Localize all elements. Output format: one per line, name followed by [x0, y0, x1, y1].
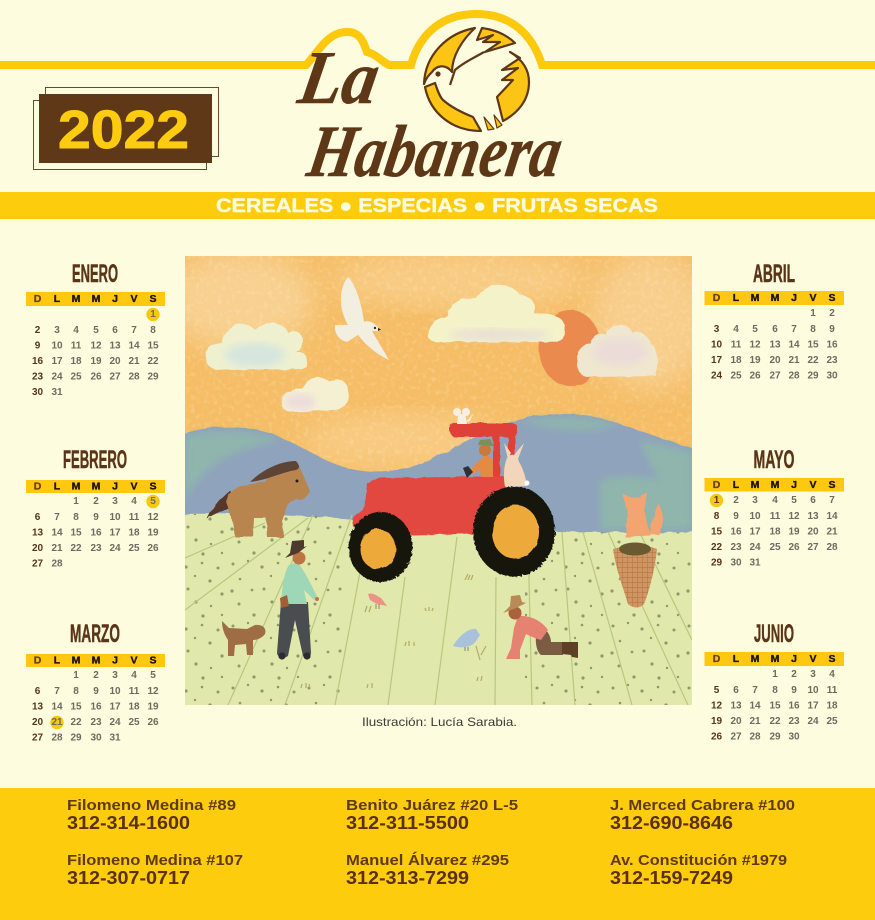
calendar: abril: 8 — [810, 324, 816, 335]
calendar: junio: 21 — [749, 716, 761, 727]
calendar: enero: L — [54, 293, 61, 305]
calendar: enero — [26, 260, 165, 398]
calendar: abril: 15 — [807, 340, 819, 350]
calendar: marzo: 12 — [147, 686, 159, 697]
calendar: mayo: M — [771, 479, 780, 491]
calendar: mayo: 20 — [807, 526, 819, 538]
calendar: abril: 28 — [788, 370, 800, 382]
footer panel: branches and phones — [0, 788, 875, 920]
branch 2: Benito Juárez #20 L-5 — [346, 797, 518, 814]
calendar: junio: 10 — [807, 685, 819, 696]
calendar: febrero: 19 — [147, 528, 159, 538]
calendar: enero: 13 — [109, 340, 121, 352]
calendar: febrero: 12 — [147, 512, 159, 523]
calendar: mayo: 12 — [788, 511, 800, 522]
calendar: abril: 26 — [749, 370, 761, 382]
calendar: marzo: 14 — [51, 702, 63, 712]
month title: ENERO — [72, 260, 118, 288]
sky — [165, 250, 710, 556]
blue bird — [453, 629, 480, 651]
calendar: mayo: 1 — [714, 495, 720, 506]
calendar: marzo: L — [54, 654, 61, 666]
calendar: junio: 15 — [769, 700, 781, 712]
calendar: enero: 15 — [147, 340, 159, 352]
calendar: junio: M — [771, 653, 780, 665]
calendar: marzo: 2 — [93, 670, 99, 681]
calendar: abril: L — [733, 292, 740, 304]
tagline band: CEREALES ● ESPECIAS ● FRUTAS SECAS — [216, 196, 658, 217]
calendar: mayo: 29 — [711, 558, 722, 568]
calendar: mayo: 7 — [829, 495, 835, 506]
calendar: mayo: 19 — [788, 526, 800, 538]
illustration credit: Ilustración: Lucía Sarabia. — [362, 715, 517, 729]
calendar: enero: 2 — [35, 325, 41, 336]
calendar: marzo: 10 — [109, 686, 121, 697]
calendar: junio: 13 — [730, 700, 742, 712]
calendar: enero: 17 — [51, 356, 63, 367]
calendar: abril: J — [791, 292, 797, 304]
calendar: febrero: D — [34, 480, 42, 492]
branch 6: 312-159-7249 — [610, 867, 733, 888]
mouse — [453, 408, 473, 424]
sun — [539, 310, 601, 386]
hills — [170, 414, 705, 560]
calendar: junio: 17 — [807, 700, 819, 712]
branch 1: Filomeno Medina #89 — [67, 797, 236, 814]
calendar: abril — [704, 260, 844, 382]
calendar: febrero: 4 — [131, 496, 137, 507]
branch 4 — [67, 852, 243, 888]
cloud lower — [282, 377, 348, 412]
calendar: enero: 10 — [51, 340, 63, 352]
calendar: febrero: 28 — [51, 558, 63, 570]
calendar: mayo: 9 — [733, 511, 739, 522]
calendar: mayo: 16 — [730, 526, 742, 538]
calendar: enero: 3 — [54, 325, 60, 336]
calendar: marzo: 15 — [70, 702, 82, 712]
calendar: enero: 4 — [73, 325, 79, 336]
calendar: enero: 16 — [32, 356, 43, 367]
branch 3: J. Merced Cabrera #100 — [610, 797, 795, 814]
calendar: marzo: 4 — [131, 670, 137, 681]
calendar: marzo: 29 — [70, 732, 82, 744]
calendar: abril: 9 — [829, 324, 835, 335]
calendar: marzo: 17 — [109, 702, 121, 712]
calendar: abril: 29 — [807, 370, 819, 382]
calendar: junio: 4 — [829, 669, 835, 680]
branch 4: 312-307-0717 — [67, 867, 190, 888]
calendar: junio: 3 — [810, 669, 816, 680]
standing farmer — [277, 540, 319, 660]
branch 6: Av. Constitución #1979 — [610, 852, 787, 869]
calendar: abril: 10 — [711, 340, 722, 350]
calendar: marzo: 6 — [35, 686, 41, 697]
calendar: marzo: 21 — [51, 717, 63, 728]
logo wordmark: La Habanera — [292, 36, 568, 193]
calendar: abril: V — [809, 292, 817, 304]
calendar: mayo: S — [828, 479, 836, 491]
calendar: abril: 12 — [749, 340, 761, 350]
rabbit — [504, 443, 530, 487]
calendar: marzo: 30 — [90, 732, 102, 744]
grass tufts — [301, 574, 486, 688]
calendar: enero: 11 — [71, 340, 82, 352]
branch 3 — [610, 797, 795, 833]
small wheel — [348, 512, 412, 582]
calendar: marzo: 19 — [147, 702, 159, 712]
calendar: marzo: 1 — [73, 670, 79, 681]
calendar: marzo: 18 — [128, 702, 140, 712]
calendar: abril: 18 — [730, 355, 742, 366]
branch 3: 312-690-8646 — [610, 812, 733, 833]
calendar: enero: 26 — [90, 372, 102, 382]
calendar: marzo: 27 — [32, 732, 43, 744]
calendar: junio: 24 — [807, 716, 819, 727]
calendar: abril: 6 — [772, 324, 778, 335]
calendar: marzo: 28 — [51, 732, 63, 744]
calendar: junio: 22 — [769, 716, 781, 727]
calendar: enero: 14 — [128, 340, 140, 352]
calendar: marzo: 7 — [54, 686, 60, 697]
calendar: febrero: 13 — [32, 528, 43, 538]
field — [170, 514, 705, 725]
tagline band — [0, 192, 875, 219]
calendar: junio: D — [713, 653, 721, 665]
calendar: mayo: 3 — [752, 495, 758, 506]
calendar: enero: 19 — [90, 356, 102, 367]
calendar: enero: S — [149, 293, 157, 305]
calendar: junio: 7 — [752, 685, 758, 696]
driver — [463, 439, 494, 478]
calendar: febrero: 8 — [73, 512, 79, 523]
calendar: enero: 22 — [147, 356, 159, 367]
calendar: enero: 12 — [90, 340, 102, 352]
calendar: febrero: J — [112, 480, 118, 492]
calendar: abril: 4 — [733, 324, 739, 335]
branch 2: 312-311-5500 — [346, 812, 469, 833]
calendar: febrero: 23 — [90, 543, 102, 554]
calendar: febrero: 20 — [32, 543, 43, 554]
calendar: marzo: V — [130, 654, 138, 666]
tractor body — [352, 476, 507, 535]
calendar: marzo: 26 — [147, 717, 159, 728]
month title: MARZO — [70, 620, 120, 648]
calendar: marzo: 13 — [32, 702, 43, 712]
calendar: febrero: M — [92, 480, 101, 492]
calendar: mayo: 22 — [711, 542, 722, 553]
calendar: febrero: 25 — [128, 543, 140, 554]
cloud left — [206, 324, 307, 370]
year badge — [34, 88, 218, 170]
calendar: febrero: 10 — [109, 512, 121, 523]
calendar: mayo: 15 — [711, 526, 722, 538]
calendar: enero: M — [92, 293, 101, 305]
calendar: enero: 24 — [51, 372, 63, 382]
big wheel — [473, 486, 555, 576]
calendar: mayo: V — [809, 479, 817, 491]
branch 5: Manuel Álvarez #295 — [346, 852, 509, 869]
calendar: marzo — [26, 620, 165, 744]
calendar: enero: D — [34, 293, 42, 305]
calendar: enero: 8 — [150, 325, 156, 336]
calendar: marzo: J — [112, 654, 118, 666]
calendar: marzo: M — [92, 654, 101, 666]
calendar: enero: 9 — [35, 340, 41, 352]
calendar: marzo: 31 — [109, 732, 121, 744]
branch 5: 312-313-7299 — [346, 867, 469, 888]
calendar: febrero: 2 — [93, 496, 99, 507]
calendar: febrero: 5 — [150, 496, 156, 507]
calendar: febrero: 7 — [54, 512, 60, 523]
calendar: enero: 25 — [70, 372, 82, 382]
calendar: abril: 14 — [788, 340, 800, 350]
pink bird — [368, 593, 387, 609]
calendar: abril: 30 — [826, 370, 838, 382]
calendar: junio: 2 — [791, 669, 797, 680]
calendar: abril: 27 — [769, 370, 781, 382]
calendar: abril: M — [771, 292, 780, 304]
calendar: abril: 21 — [788, 355, 800, 366]
cloud over sun — [577, 324, 657, 377]
calendar: marzo: 24 — [109, 717, 121, 728]
calendar: mayo: 24 — [749, 542, 761, 553]
branch 6 — [610, 852, 787, 888]
calendar: enero: 31 — [51, 387, 63, 398]
calendar: junio: V — [809, 653, 817, 665]
calendar: febrero: 16 — [90, 528, 102, 538]
calendar: marzo: 25 — [128, 717, 140, 728]
calendar: mayo — [704, 446, 844, 568]
calendar: junio: 12 — [711, 700, 722, 712]
calendar: enero: 5 — [93, 325, 99, 336]
header yellow contour line — [0, 14, 875, 65]
calendar: febrero: 18 — [128, 528, 140, 538]
calendar: junio: 16 — [788, 700, 800, 712]
calendar: junio: 30 — [788, 732, 800, 742]
panel: farm illustration — [185, 256, 692, 705]
calendar: junio: M — [751, 653, 760, 665]
calendar: junio: 27 — [730, 732, 742, 742]
calendar: mayo: 25 — [769, 542, 781, 553]
month title: FEBRERO — [63, 446, 127, 474]
dog — [222, 621, 265, 656]
calendar: marzo: 22 — [70, 717, 82, 728]
calendar: junio: 1 — [772, 669, 778, 680]
calendar: junio: J — [791, 653, 797, 665]
calendar: abril: S — [828, 292, 836, 304]
calendar: abril: 2 — [829, 308, 835, 319]
calendar: abril: 16 — [826, 340, 838, 350]
calendar: junio: 19 — [711, 716, 722, 727]
month title: JUNIO — [754, 620, 794, 648]
logo wordmark: La Habanera: La — [292, 36, 386, 120]
calendar: marzo: 5 — [150, 670, 156, 681]
calendar: junio: 23 — [788, 716, 800, 727]
calendar: abril: 23 — [826, 355, 838, 366]
calendar: febrero: S — [149, 480, 157, 492]
calendar: febrero: 15 — [70, 528, 82, 538]
cloud upper right — [428, 285, 565, 342]
calendar: enero: 23 — [32, 372, 43, 382]
year badge: 2022 — [58, 100, 189, 160]
calendar: febrero: 1 — [73, 496, 79, 507]
calendar: febrero — [26, 446, 165, 570]
calendar: enero: 20 — [109, 356, 121, 367]
kneeling farmer — [503, 595, 578, 659]
calendar: abril: 7 — [791, 324, 797, 335]
calendar: junio: 26 — [711, 732, 722, 742]
calendar: abril: 11 — [731, 340, 742, 350]
calendar: junio: 9 — [791, 685, 797, 696]
calendar: enero: M — [72, 293, 81, 305]
calendar: febrero: M — [72, 480, 81, 492]
calendar: febrero: L — [54, 480, 61, 492]
icon: dove logo — [424, 26, 529, 132]
calendar: mayo: 4 — [772, 495, 778, 506]
calendar: febrero: V — [130, 480, 138, 492]
calendar: mayo: 17 — [749, 526, 761, 538]
month title: MAYO — [754, 446, 794, 474]
calendar: marzo: S — [149, 654, 157, 666]
calendar: marzo: 20 — [32, 717, 43, 728]
calendar: febrero: 6 — [35, 512, 41, 523]
calendar: mayo: 28 — [826, 542, 838, 553]
calendar: mayo: 11 — [770, 511, 781, 522]
basket — [613, 542, 657, 607]
calendar: febrero: 24 — [109, 543, 121, 554]
calendar: febrero: 27 — [32, 558, 43, 570]
calendar: febrero: 14 — [51, 528, 63, 538]
calendar: enero: 7 — [131, 325, 137, 336]
calendar: junio: 8 — [772, 685, 778, 696]
calendar: mayo: 31 — [749, 558, 761, 568]
calendar: marzo: 11 — [129, 686, 140, 697]
calendar: abril: 22 — [807, 355, 819, 366]
tractor — [348, 408, 555, 582]
branch 1 — [67, 797, 236, 833]
calendar: marzo: 8 — [73, 686, 79, 697]
calendar: mayo: 23 — [730, 542, 742, 553]
calendar: junio: 5 — [714, 685, 720, 696]
calendar: mayo: M — [751, 479, 760, 491]
calendar: mayo: 26 — [788, 542, 800, 553]
calendar: enero: 6 — [112, 325, 118, 336]
calendar: abril: 25 — [730, 370, 742, 382]
branch 5 — [346, 852, 509, 888]
calendar: febrero: 11 — [129, 512, 140, 523]
calendar: enero: 28 — [128, 372, 140, 382]
horse — [207, 461, 310, 537]
month title: ABRIL — [753, 260, 795, 288]
calendar: mayo: 13 — [807, 511, 819, 522]
calendar: enero: 27 — [109, 372, 121, 382]
calendar: febrero: 9 — [93, 512, 99, 523]
calendar: mayo: 8 — [714, 511, 720, 522]
calendar: marzo: 23 — [90, 717, 102, 728]
calendar: junio: 29 — [769, 732, 781, 742]
calendar: mayo: 27 — [807, 542, 819, 553]
calendar: junio — [704, 620, 844, 742]
calendar: junio: 6 — [733, 685, 739, 696]
calendar: febrero: 3 — [112, 496, 118, 507]
calendar: mayo: 5 — [791, 495, 797, 506]
calendar: abril: D — [713, 292, 721, 304]
calendar: mayo: L — [733, 479, 740, 491]
calendar: marzo: 3 — [112, 670, 118, 681]
calendar: enero: 1 — [150, 309, 156, 320]
branch 2 — [346, 797, 518, 833]
branch 4: Filomeno Medina #107 — [67, 852, 243, 869]
calendar: junio: 18 — [826, 700, 838, 712]
calendar: junio: 25 — [826, 716, 838, 727]
calendar: junio: 14 — [749, 700, 761, 712]
calendar: febrero: 21 — [51, 543, 63, 554]
calendar: abril: 17 — [711, 355, 722, 366]
calendar: junio: 20 — [730, 716, 742, 727]
fox — [622, 493, 662, 537]
calendar: marzo: D — [34, 654, 42, 666]
calendar: enero: 18 — [70, 356, 82, 367]
calendar: mayo: 2 — [733, 495, 739, 506]
calendar: marzo: 16 — [90, 702, 102, 712]
calendar: enero: J — [112, 293, 118, 305]
calendar: mayo: 21 — [826, 526, 838, 538]
calendar: junio: 28 — [749, 732, 761, 742]
calendar: mayo: 30 — [730, 558, 742, 568]
calendar: junio: 11 — [827, 685, 838, 696]
calendar: abril: 3 — [714, 324, 720, 335]
calendar: febrero: 17 — [109, 528, 121, 538]
calendar: junio: L — [733, 653, 740, 665]
calendar: mayo: 14 — [826, 511, 838, 522]
calendar: mayo: D — [713, 479, 721, 491]
calendar: junio: S — [828, 653, 836, 665]
calendar: abril: 20 — [769, 355, 781, 366]
branch 1: 312-314-1600 — [67, 812, 190, 833]
calendar: marzo: M — [72, 654, 81, 666]
calendar: abril: 5 — [752, 324, 758, 335]
roof and posts — [450, 423, 518, 478]
calendar: mayo: 10 — [749, 511, 761, 522]
calendar: mayo: J — [791, 479, 797, 491]
calendar: mayo: 6 — [810, 495, 816, 506]
calendar: abril: 13 — [769, 340, 781, 350]
calendar: enero: 29 — [147, 372, 159, 382]
calendar: enero: 30 — [32, 387, 43, 398]
calendar: abril: 19 — [749, 355, 761, 366]
calendar: abril: 24 — [711, 370, 722, 382]
calendar: febrero: 22 — [70, 543, 82, 554]
calendar: febrero: 26 — [147, 543, 159, 554]
calendar: enero: V — [130, 293, 138, 305]
hill green shading — [185, 417, 692, 530]
flying dove — [335, 277, 389, 360]
calendar: abril: 1 — [810, 308, 816, 319]
calendar: marzo: 9 — [93, 686, 99, 697]
calendar: mayo: 18 — [769, 526, 781, 538]
calendar: enero: 21 — [128, 356, 140, 367]
logo wordmark: La Habanera: Habanera — [301, 111, 568, 193]
calendar: abril: M — [751, 292, 760, 304]
